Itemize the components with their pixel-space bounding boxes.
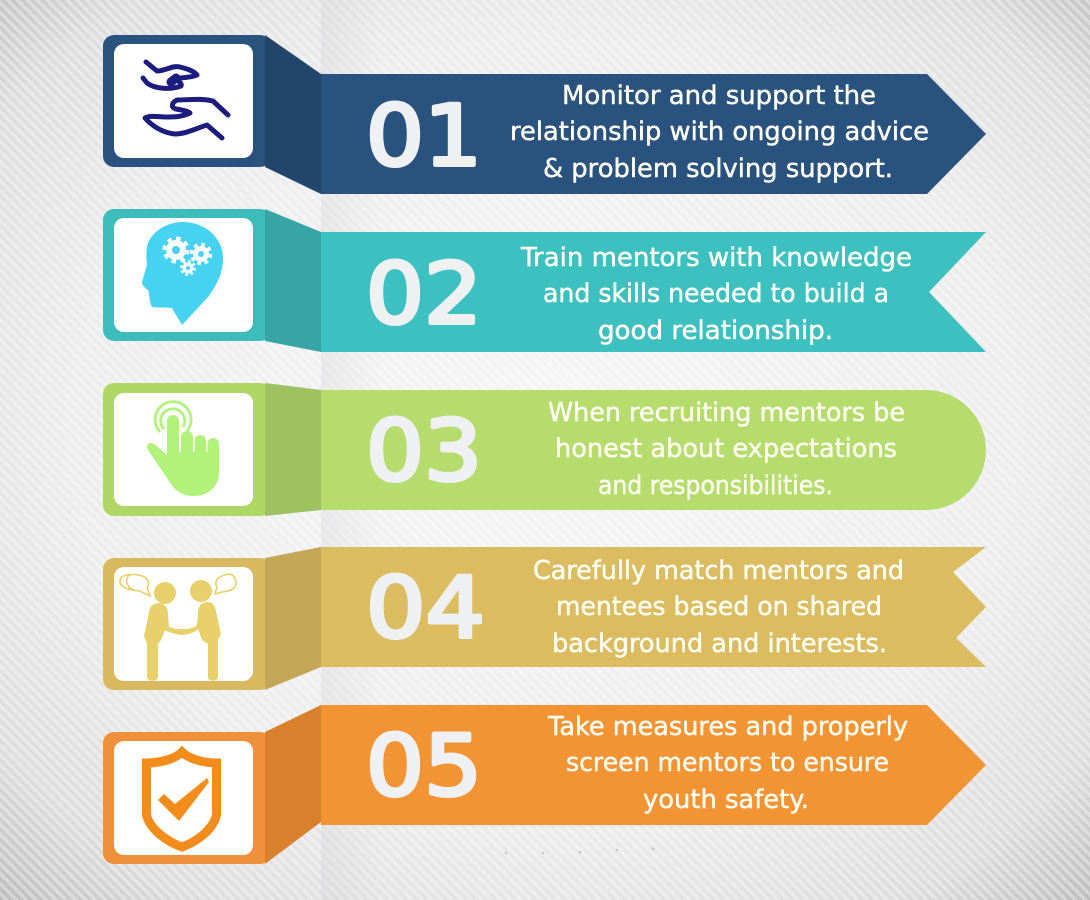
step 2 icon card	[114, 218, 253, 332]
step 1 text: relationship with ongoing advice	[510, 117, 929, 147]
step 5 text: screen mentors to ensure	[566, 748, 889, 778]
icon: caring hands	[143, 62, 228, 138]
step 1 text: Monitor and support the	[562, 81, 876, 111]
step 2	[103, 209, 986, 352]
step 3 icon card	[114, 393, 253, 506]
step 4 text: mentees based on shared	[556, 592, 882, 622]
step 4 icon card	[114, 567, 253, 681]
step 1 text: & problem solving support.	[543, 154, 893, 184]
step 5 text	[547, 712, 908, 815]
step 3 ribbon	[321, 390, 986, 510]
step 5 icon panel	[103, 732, 271, 864]
step 4 icon panel	[103, 558, 271, 690]
step 2 ribbon	[321, 232, 986, 352]
step 3 number: 03	[366, 402, 482, 500]
icon: tapping hand	[147, 402, 219, 496]
step 1 icon card	[114, 44, 253, 158]
step 2 icon panel	[103, 209, 271, 341]
step 3	[103, 383, 986, 516]
step 3 text: When recruiting mentors be	[548, 398, 905, 428]
icon: head with gears	[142, 222, 223, 325]
step 4 text	[533, 556, 904, 659]
step 4 ribbon	[321, 547, 986, 667]
icon: shield with check mark	[146, 752, 216, 847]
step 1 icon panel	[103, 35, 271, 167]
step 2 text: and skills needed to build a	[543, 279, 889, 309]
step 1 number: 01	[366, 87, 482, 185]
step 3 text: honest about expectations	[555, 434, 897, 464]
step 3 text: and responsibilities.	[598, 471, 833, 501]
step 5	[103, 705, 986, 864]
step 1 ribbon	[321, 74, 986, 194]
step 2 text: Train mentors with knowledge	[520, 243, 912, 273]
step 3 icon panel	[103, 383, 271, 516]
step 5 text: youth safety.	[643, 785, 809, 815]
step 1 fold	[265, 35, 321, 194]
step 2 number: 02	[366, 245, 482, 343]
step 5 fold	[265, 705, 321, 864]
step 3 text	[548, 398, 905, 501]
step 3 fold	[265, 383, 321, 516]
step 5 text: Take measures and properly	[547, 712, 908, 742]
step 2 fold	[265, 209, 321, 352]
step 5 number: 05	[366, 717, 482, 815]
step 5 ribbon	[321, 705, 986, 825]
icon: handshake with speech bubbles	[120, 574, 236, 681]
step 1 text	[510, 81, 929, 184]
step 4 number: 04	[366, 559, 485, 657]
step 4	[103, 547, 986, 690]
step 2 text: good relationship.	[598, 316, 833, 346]
step 1	[103, 35, 986, 194]
step 4 text: Carefully match mentors and	[533, 556, 904, 586]
step 4 fold	[265, 547, 321, 690]
step 2 text	[520, 243, 912, 346]
step 5 icon card	[114, 741, 253, 855]
step 4 text: background and interests.	[552, 629, 887, 659]
